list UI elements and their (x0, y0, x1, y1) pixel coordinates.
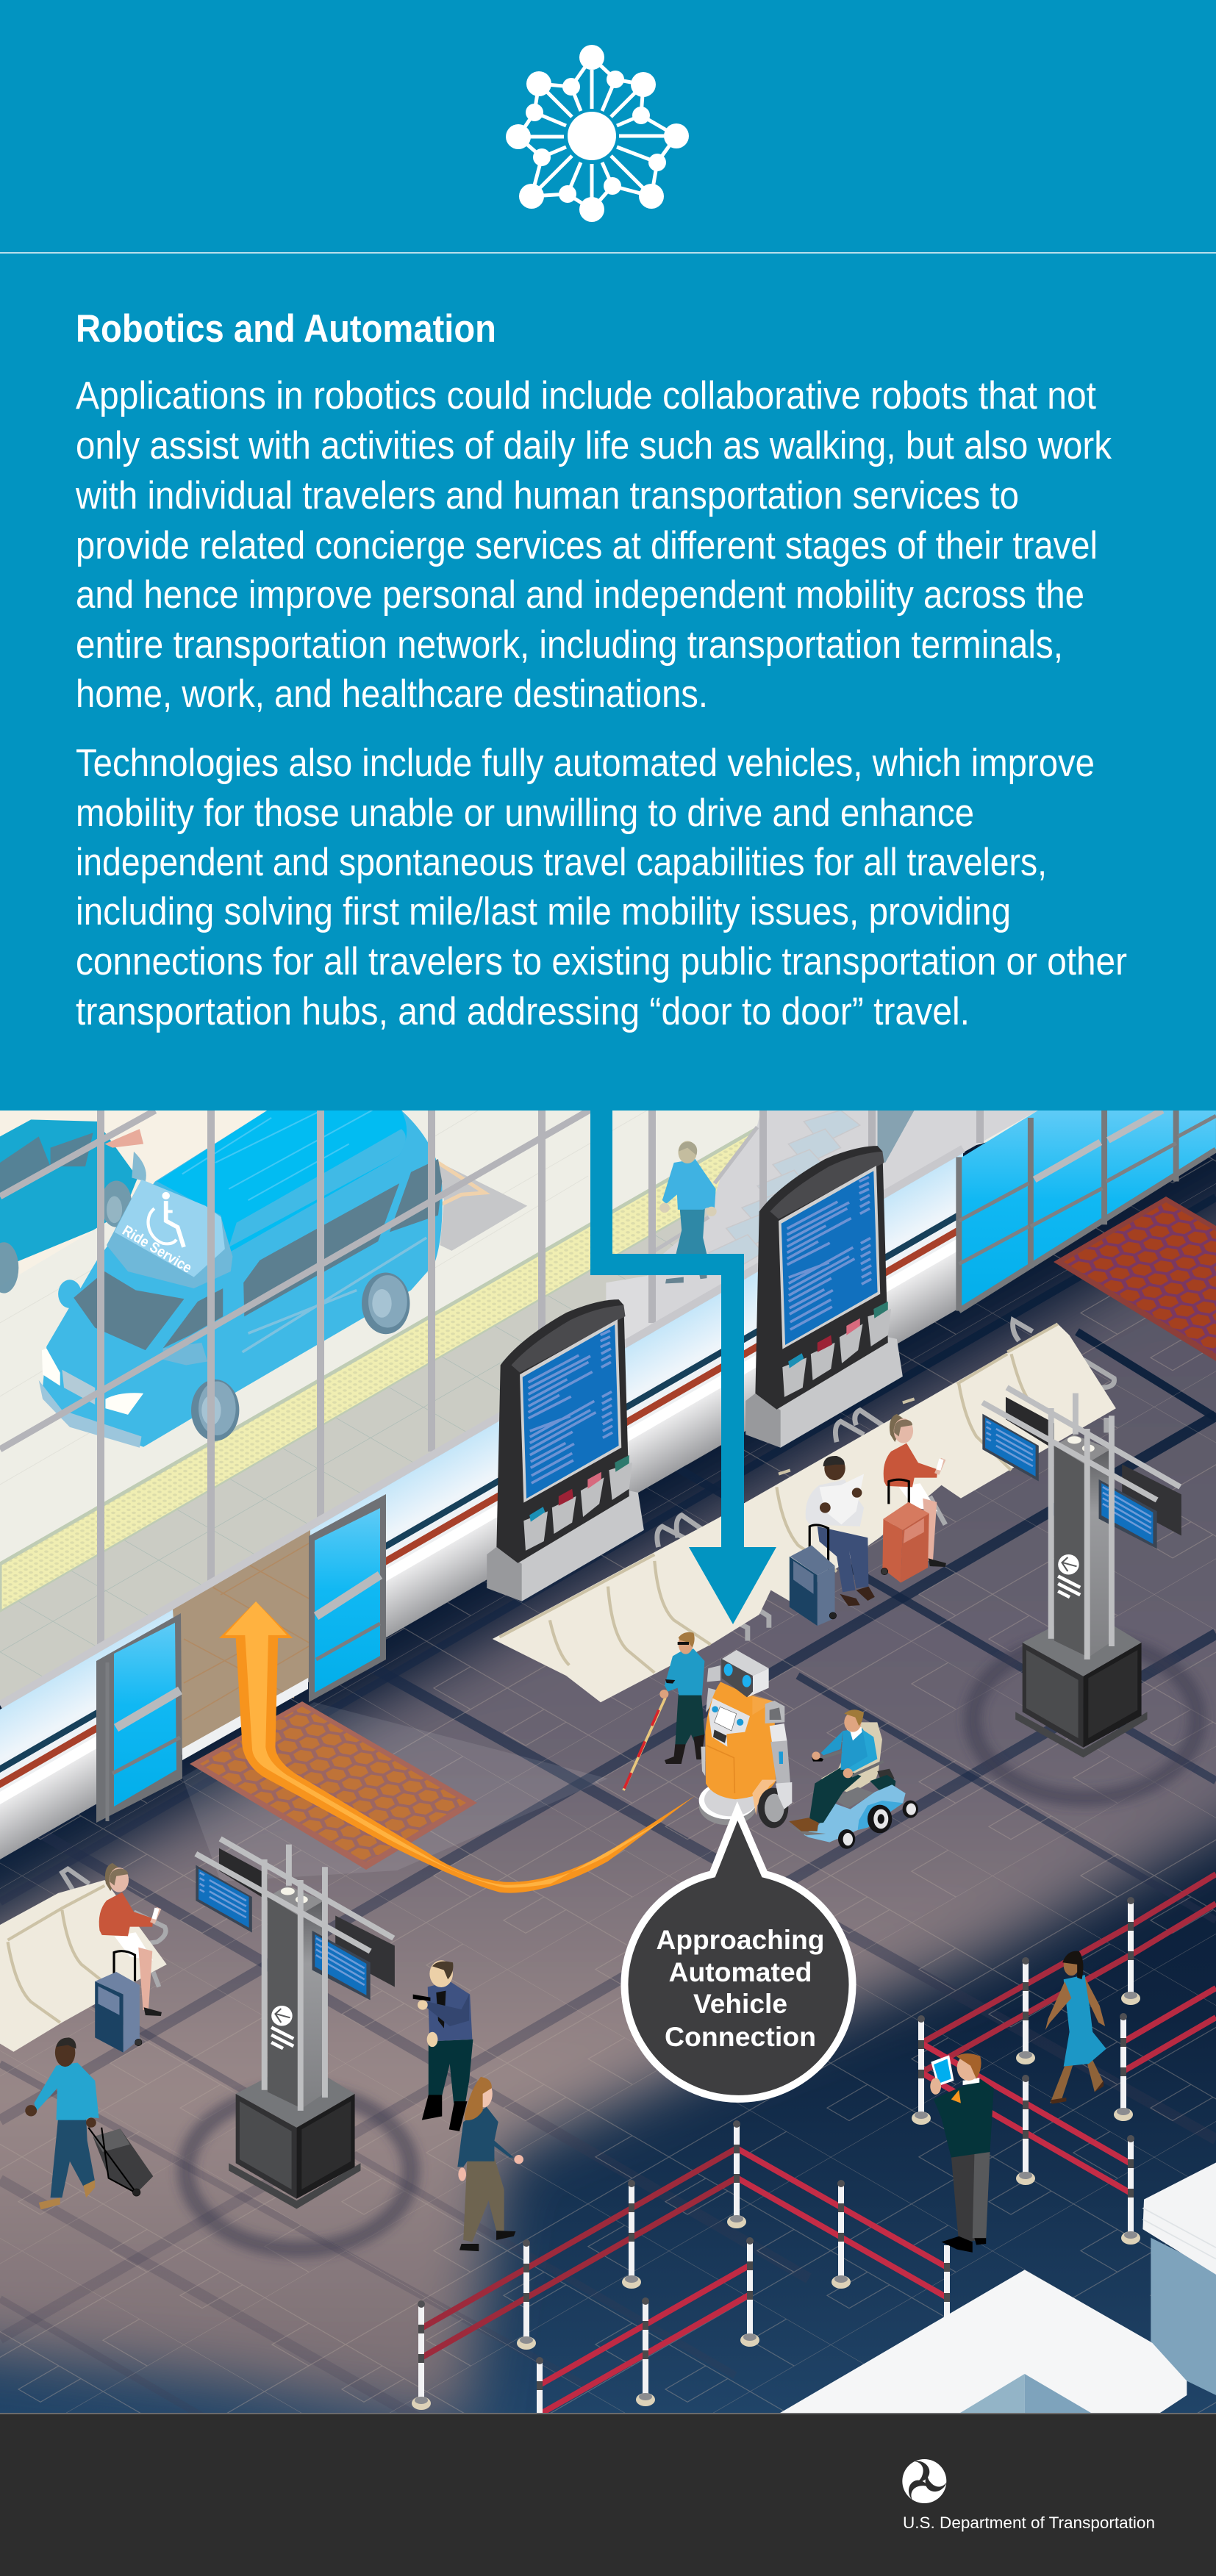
kiosk board second (487, 1299, 644, 1601)
footer bar (0, 2414, 1216, 2576)
traveler on escalator (659, 1141, 717, 1283)
heading: Robotics and Automation (76, 307, 496, 351)
window mullions (0, 1102, 980, 1705)
left bench (0, 1869, 167, 2052)
text block: paragraph 1: only assist with activities of daily life such as walking, but also work (76, 424, 1112, 467)
text block: paragraph 1 (75, 374, 1112, 716)
window exterior (0, 1099, 1103, 1705)
icon: DOT logo (902, 2459, 947, 2503)
carpet left (190, 1701, 477, 1870)
text block: paragraph 2: including solving first mile/last mile mobility issues, providing (76, 890, 1011, 933)
concierge robot (699, 1650, 792, 1828)
text block: paragraph 1: provide related concierge services at different stages of their travel (76, 524, 1098, 567)
walking woman (457, 2077, 523, 2251)
kiosk board (745, 1146, 903, 1448)
pickup zone markings (436, 1160, 527, 1251)
visually impaired man with cane (623, 1632, 704, 1790)
light beam on floor (182, 1702, 608, 1881)
sliding door left (96, 1613, 182, 1823)
callout bubble (625, 1811, 853, 2099)
orange path arrow (219, 1601, 695, 1893)
callout bubble: Vehicle (693, 1989, 787, 2019)
orange luggage (881, 1479, 929, 1582)
carpet right (1054, 1196, 1216, 1361)
blue luggage (95, 1951, 142, 2053)
second vehicle (0, 1119, 146, 1294)
text block: paragraph 2: Technologies also include fully automated vehicles, which improve (76, 742, 1095, 785)
callout bubble: Approaching (656, 1925, 825, 1955)
sliding door right (309, 1494, 386, 1702)
text block: paragraph 1: entire transportation network, including transportation terminals, (76, 623, 1063, 667)
panel: terminal scene illustration (0, 1099, 1216, 2473)
walking man with suitcase (25, 2037, 153, 2210)
callout bubble: Automated (669, 1957, 812, 1987)
callout bubble: Connection (665, 2022, 816, 2052)
text block: paragraph 2: independent and spontaneous travel capabilities for all travelers, (76, 841, 1047, 884)
direction arrow (590, 1111, 776, 1624)
header background (0, 0, 1216, 1111)
ride service van (39, 1111, 443, 1448)
floor (0, 1111, 1216, 2473)
terminal wall (0, 1153, 963, 1859)
icon: robotics network (506, 45, 689, 222)
footer agency text: U.S. Department of Transportation (903, 2514, 1155, 2532)
man with phone (413, 1960, 473, 2131)
man with tablet (930, 2053, 994, 2253)
traveler on mobility scooter (784, 1709, 918, 1849)
seating row right (493, 1320, 1116, 1702)
seated woman with phone (884, 1414, 946, 1567)
info pylon (186, 1839, 411, 2250)
text block: paragraph 1: home, work, and healthcare destinations. (76, 672, 708, 716)
glass entrance right (959, 1102, 1216, 1311)
text block: paragraph 2: transportation hubs, and addressing “door to door” travel. (76, 990, 970, 1033)
information counter right (1142, 2162, 1216, 2395)
stanchions (412, 1874, 1216, 2425)
text block: paragraph 2 (76, 742, 1127, 1033)
text block: paragraph 1: and hence improve personal and independent mobility across the (76, 573, 1084, 617)
icon: wheelchair symbol (149, 1194, 184, 1247)
escalator interior (606, 1111, 1038, 1350)
van label: Ride Service (119, 1222, 195, 1277)
text block: paragraph 2: connections for all travelers to existing public transportation or other (76, 940, 1127, 983)
information counter front (776, 2270, 1187, 2415)
seated man with newspaper and luggage (790, 1456, 875, 1626)
text block: paragraph 1: with individual travelers and human transportation services to (75, 474, 1019, 517)
info pylon right (973, 1388, 1198, 1798)
woman in blue dress (1045, 1951, 1106, 2104)
text block: paragraph 1: Applications in robotics could include collaborative robots that not (76, 374, 1096, 417)
text block: paragraph 2: mobility for those unable or unwilling to drive and enhance (76, 792, 974, 835)
left seated woman (99, 1863, 162, 2016)
entrance opening (173, 1530, 310, 1760)
